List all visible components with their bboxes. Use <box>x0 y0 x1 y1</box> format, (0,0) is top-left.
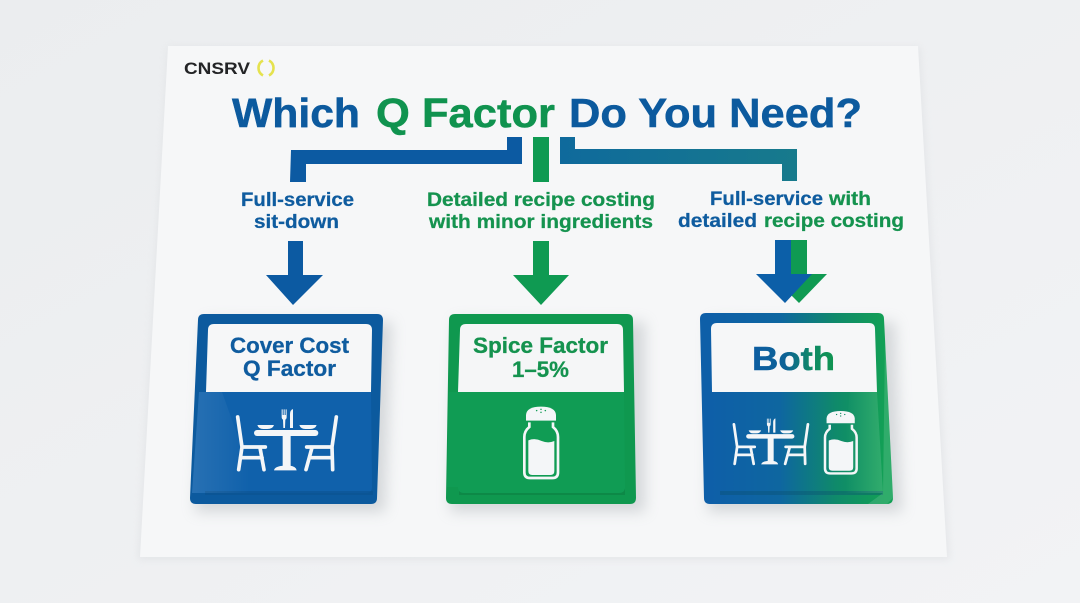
label: detailed recipe costing <box>427 190 655 233</box>
heading <box>473 333 608 382</box>
label: detailed recipe costing: Detailed recipe costing <box>427 190 655 211</box>
heading: 1–5% <box>512 357 569 382</box>
label: full-service with detailed recipe costing <box>678 189 904 232</box>
connector: right bracket <box>560 137 797 181</box>
label: full-service with detailed recipe costing: detailed <box>678 211 757 232</box>
label: detailed recipe costing: with minor ingredients <box>428 212 653 233</box>
card: cover cost q factor <box>190 314 392 512</box>
heading: Q Factor <box>243 356 336 381</box>
icon: spice shaker <box>524 407 558 478</box>
label: full-service sit-down: Full-service <box>241 190 354 211</box>
poster sheet <box>138 46 950 560</box>
heading: Both <box>752 340 835 377</box>
title: Which <box>232 90 360 136</box>
card: spice factor <box>446 314 645 512</box>
arrow: right double <box>756 240 827 303</box>
arrow: left <box>266 241 323 305</box>
icon: spice shaker <box>825 411 857 473</box>
title: Do You Need? <box>569 90 862 136</box>
heading: Spice Factor <box>473 333 608 358</box>
label: full-service with detailed recipe costing: Full-service <box>710 189 823 210</box>
icon: table and chairs <box>238 409 336 470</box>
white header <box>711 323 877 392</box>
label: full-service sit-down: sit-down <box>254 212 339 233</box>
logo: CNSRV: CNSRV <box>184 60 250 78</box>
white header <box>458 324 624 392</box>
arrow: center <box>513 241 569 305</box>
heading: Cover Cost <box>230 333 350 358</box>
connector: center bar <box>533 137 549 182</box>
heading <box>230 333 350 381</box>
logo: CNSRV <box>184 60 273 78</box>
card: both <box>700 313 902 512</box>
title: Q Factor <box>376 90 555 136</box>
connector: left bracket <box>290 137 522 182</box>
label: full-service with detailed recipe costing: recipe costing <box>764 211 904 232</box>
label: full-service with detailed recipe costing: with <box>828 189 871 210</box>
label: full-service sit-down <box>241 190 354 233</box>
white header <box>206 324 372 392</box>
title <box>232 90 862 136</box>
icon: table and chairs <box>734 418 808 464</box>
